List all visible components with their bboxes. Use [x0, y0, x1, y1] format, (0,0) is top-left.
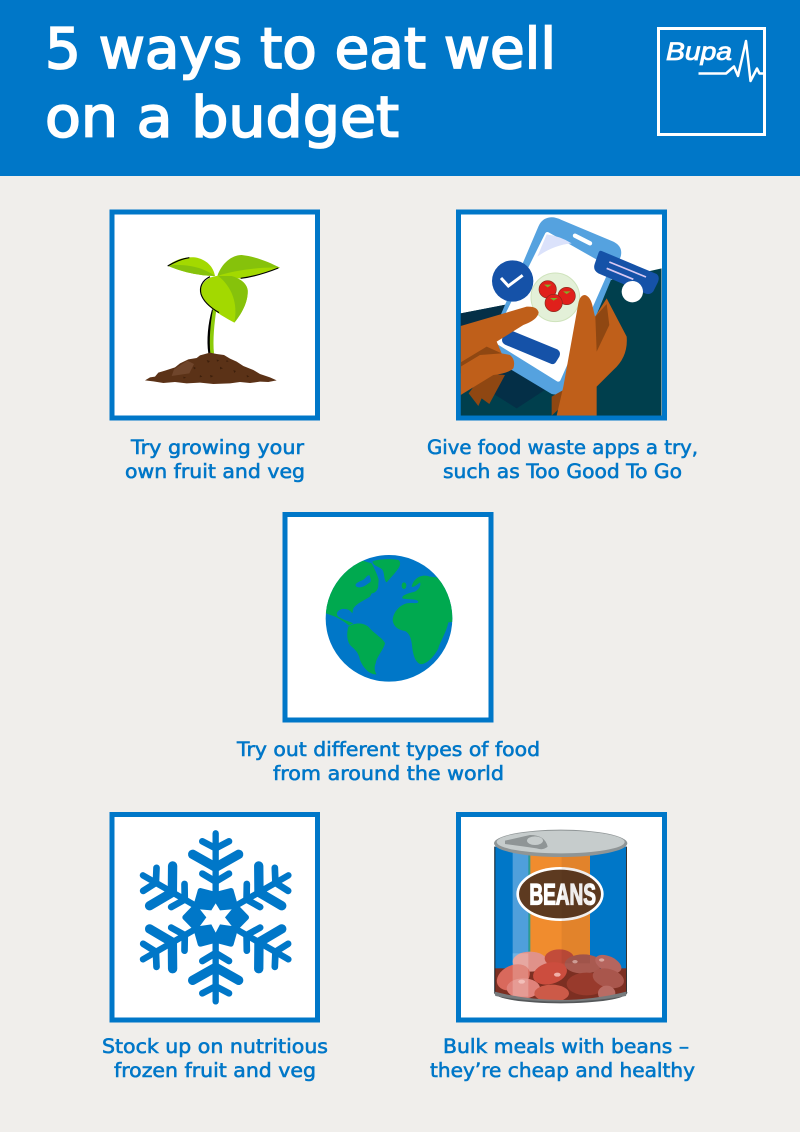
caption — [125, 436, 305, 483]
caption: Stock up on nutritious — [102, 1035, 328, 1058]
caption: they’re cheap and healthy — [430, 1059, 695, 1082]
panel: food waste apps — [427, 212, 698, 483]
check badge — [492, 260, 533, 302]
panel frame — [285, 514, 491, 720]
beans — [495, 949, 626, 1000]
can lid — [494, 830, 627, 857]
message bubble — [594, 251, 659, 294]
icon: Bupa logo — [658, 28, 765, 134]
panel: grow your own — [112, 212, 318, 483]
panel: frozen fruit and veg — [102, 814, 328, 1082]
icon: snowflake — [131, 833, 300, 1001]
icon: tomatoes — [531, 273, 580, 322]
icon: hands — [469, 373, 505, 406]
caption: frozen fruit and veg — [114, 1059, 316, 1082]
panel: world foods — [236, 514, 540, 785]
icon: bean can: BEANS — [529, 878, 596, 911]
caption — [102, 1035, 328, 1082]
caption: such as Too Good To Go — [443, 460, 682, 483]
caption: own fruit and veg — [125, 460, 305, 483]
title: 5 ways to eat well — [45, 17, 556, 82]
title: on a budget — [45, 86, 399, 150]
icon: seedling — [145, 255, 280, 384]
header banner — [0, 0, 800, 176]
caption: Try growing your — [130, 436, 305, 459]
caption — [236, 738, 540, 785]
panel frame — [458, 212, 664, 418]
icon: Bupa logo: Bupa — [666, 38, 732, 66]
caption: Bulk meals with beans – — [443, 1035, 689, 1058]
caption: Give food waste apps a try, — [427, 436, 698, 459]
panel frame — [112, 212, 318, 418]
icon: phone — [488, 217, 621, 395]
caption — [427, 436, 698, 483]
caption: Try out different types of food — [236, 738, 540, 761]
icon: globe — [322, 555, 455, 682]
panel frame — [458, 814, 664, 1020]
panel: beans — [430, 814, 695, 1082]
button — [502, 330, 560, 364]
illustration: phone and hands — [461, 217, 662, 416]
icon: bean can — [493, 830, 627, 1005]
panel frame — [112, 814, 318, 1020]
caption: from around the world — [273, 762, 504, 785]
caption — [430, 1035, 695, 1082]
title — [45, 17, 556, 150]
